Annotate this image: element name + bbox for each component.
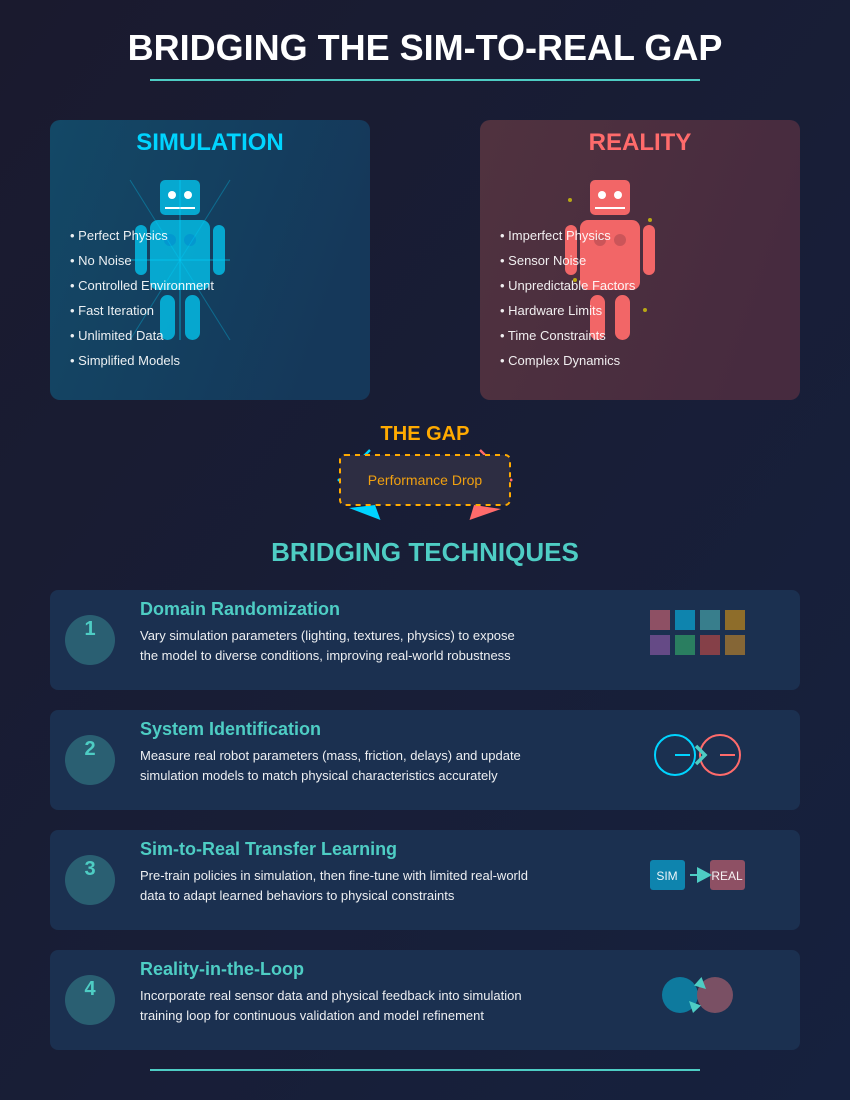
icon: sim to real: SIM bbox=[656, 869, 678, 883]
icon: sim to real: REAL bbox=[711, 869, 743, 883]
heading: simulation: SIMULATION bbox=[136, 129, 284, 156]
text: description: Pre-train policies in simulation, then fine-tune with limited real-world bbox=[140, 868, 528, 883]
number badge 4 bbox=[65, 975, 115, 1025]
icon: color grid bbox=[650, 610, 745, 655]
number badge 3: 3 bbox=[84, 858, 96, 880]
heading: transfer learning: Sim-to-Real Transfer Learning bbox=[140, 839, 397, 859]
list: reality traits: • Imperfect Physics bbox=[500, 228, 611, 243]
text: description bbox=[140, 628, 515, 663]
list: reality traits: • Hardware Limits bbox=[500, 303, 603, 318]
panel: technique 4 bbox=[50, 950, 800, 1050]
text: description: Measure real robot parameters (mass, friction, delays) and update bbox=[140, 748, 521, 763]
list: reality traits: • Complex Dynamics bbox=[500, 353, 621, 368]
number badge 1 bbox=[65, 615, 115, 665]
callout: performance drop: Performance Drop bbox=[368, 472, 482, 488]
number badge 3 bbox=[65, 855, 115, 905]
list: simulation traits: • Simplified Models bbox=[70, 353, 181, 368]
list: reality traits: • Time Constraints bbox=[500, 328, 606, 343]
icon: linked circles bbox=[655, 735, 740, 775]
gap diagram bbox=[338, 423, 512, 520]
text: description: data to adapt learned behaviors to physical constraints bbox=[140, 888, 455, 903]
icon: reality robot bbox=[565, 180, 655, 340]
panel: reality bbox=[480, 120, 800, 400]
list: simulation traits: • No Noise bbox=[70, 253, 132, 268]
list: reality traits bbox=[500, 228, 636, 368]
text: description bbox=[140, 748, 521, 783]
panel: simulation bbox=[50, 120, 370, 400]
list: simulation traits: • Unlimited Data bbox=[70, 328, 164, 343]
text: description: Incorporate real sensor data and physical feedback into simulation bbox=[140, 988, 522, 1003]
text: description: Vary simulation parameters (lighting, textures, physics) to expose bbox=[140, 628, 515, 643]
heading: reality: REALITY bbox=[589, 129, 691, 156]
text: description: the model to diverse conditions, improving real-world robustness bbox=[140, 648, 511, 663]
list: reality traits: • Sensor Noise bbox=[500, 253, 586, 268]
text: description bbox=[140, 868, 528, 903]
list: simulation traits: • Fast Iteration bbox=[70, 303, 154, 318]
text: description: simulation models to match physical characteristics accurately bbox=[140, 768, 498, 783]
heading: the gap: THE GAP bbox=[381, 423, 469, 445]
list: simulation traits: • Controlled Environment bbox=[70, 278, 214, 293]
number badge 2 bbox=[65, 735, 115, 785]
list: simulation traits bbox=[70, 228, 214, 368]
list: reality traits: • Unpredictable Factors bbox=[500, 278, 636, 293]
list: simulation traits: • Perfect Physics bbox=[70, 228, 168, 243]
text: description bbox=[140, 988, 522, 1023]
heading: domain randomization: Domain Randomization bbox=[140, 599, 340, 619]
number badge 1: 1 bbox=[84, 618, 96, 640]
callout: performance drop bbox=[340, 455, 510, 505]
heading: reality in the loop: Reality-in-the-Loop bbox=[140, 959, 304, 979]
arrow: simulation to gap bbox=[338, 450, 380, 520]
icon: simulation robot bbox=[130, 180, 230, 340]
text: description: training loop for continuous validation and model refinement bbox=[140, 1008, 484, 1023]
icon: feedback loop bbox=[662, 977, 733, 1013]
arrow: reality to gap bbox=[470, 450, 512, 520]
title: BRIDGING THE SIM-TO-REAL GAP bbox=[128, 27, 722, 68]
panel: technique 3 bbox=[50, 830, 800, 930]
icon: sim to real bbox=[650, 860, 745, 890]
number badge 2: 2 bbox=[84, 738, 96, 760]
panel: technique 1 bbox=[50, 590, 800, 690]
panel: technique 2 bbox=[50, 710, 800, 810]
heading: system identification: System Identification bbox=[140, 719, 321, 739]
number badge 4: 4 bbox=[84, 978, 96, 1000]
heading: bridging techniques: BRIDGING TECHNIQUES bbox=[271, 537, 579, 567]
